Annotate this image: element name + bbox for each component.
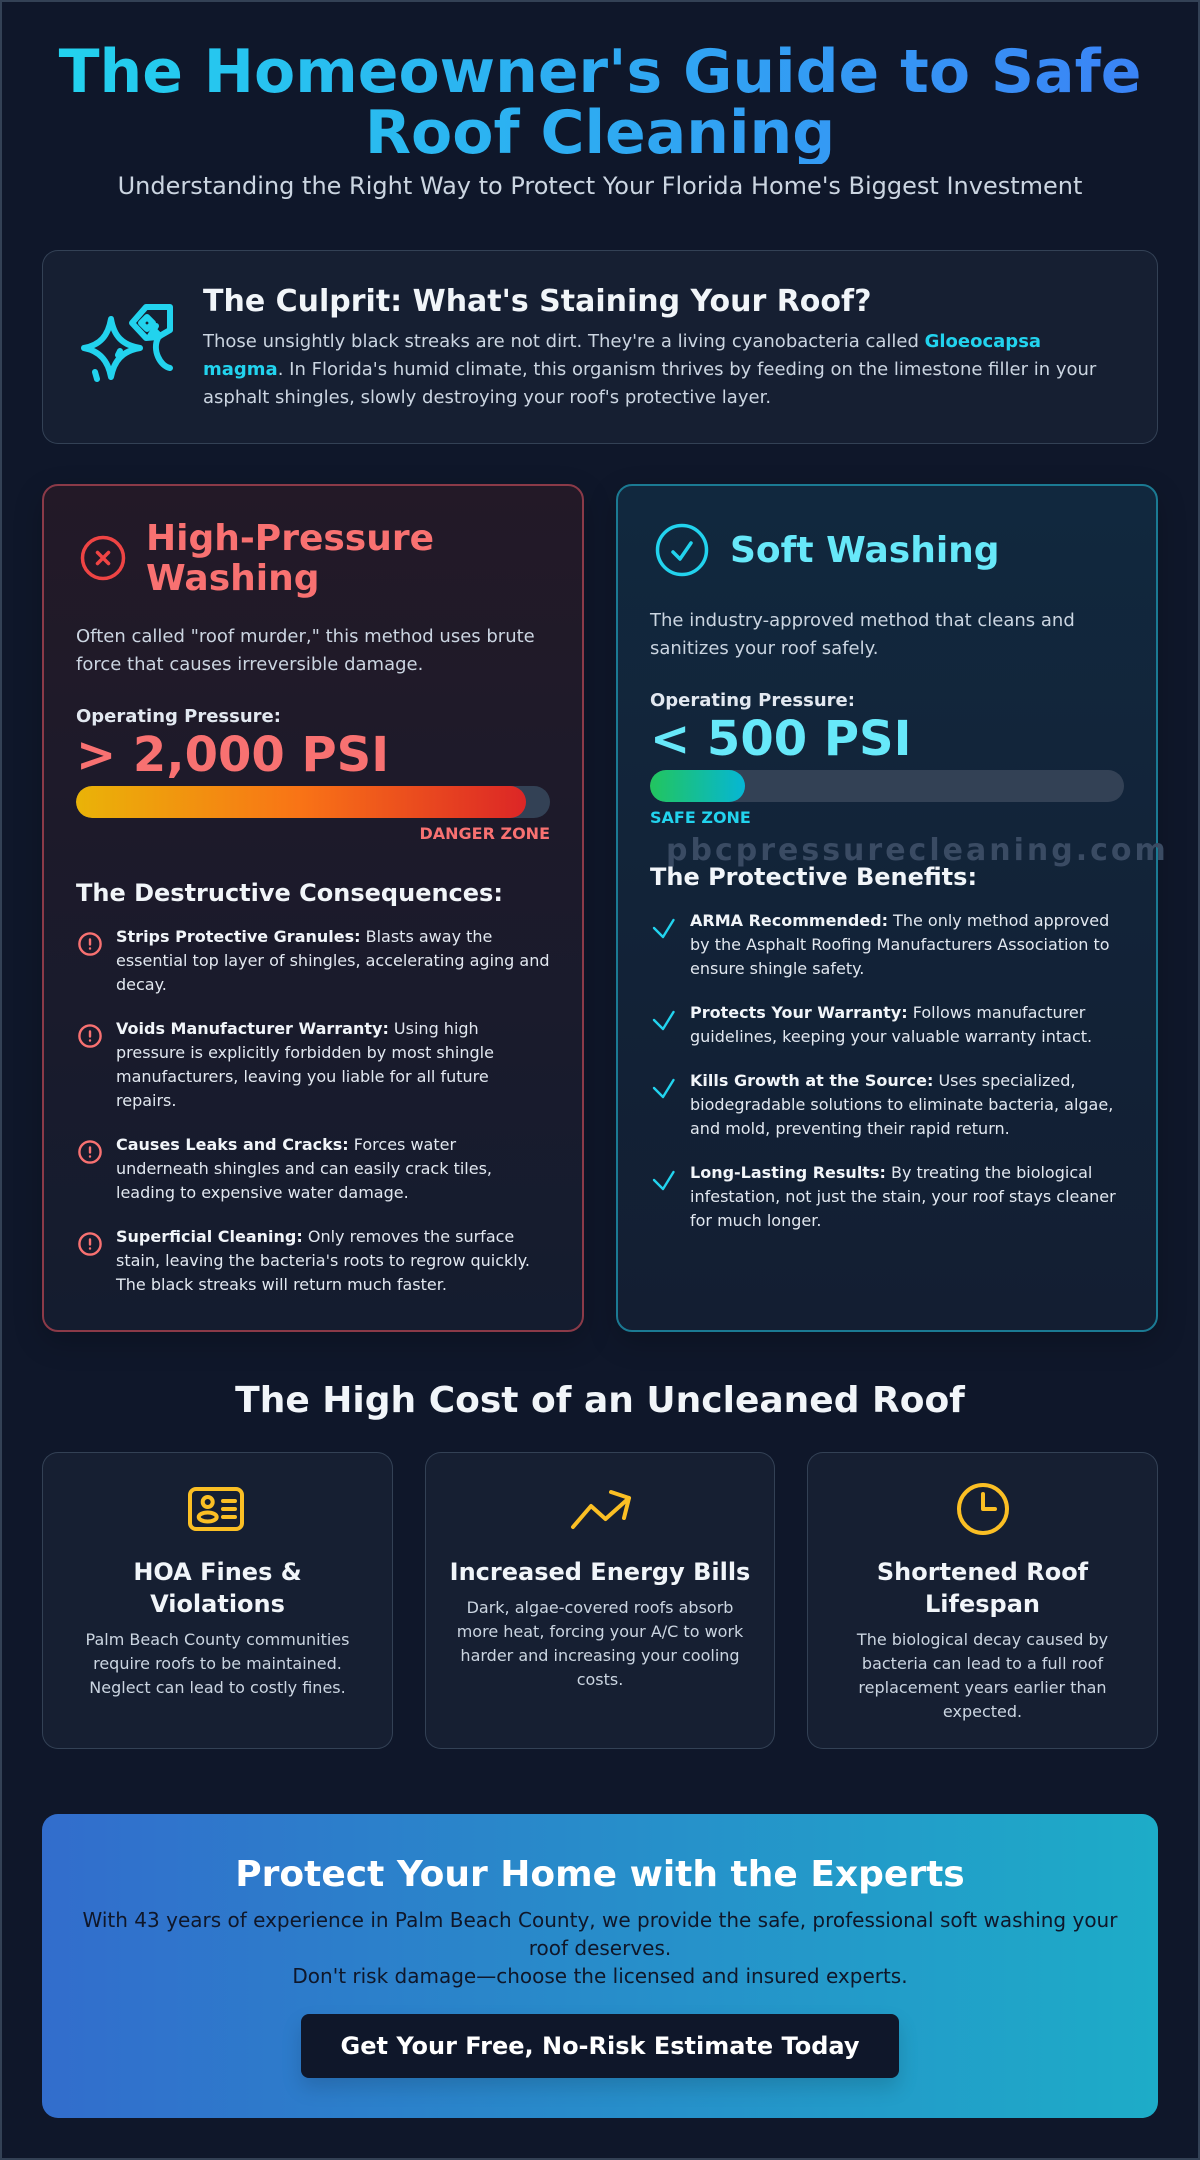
consequence 3: [78, 1135, 492, 1202]
card text: harder and increasing your cooling: [460, 1646, 740, 1665]
consequences heading: The Destructive Consequences:: [76, 879, 503, 907]
text: Long-Lasting Results: By treating the biological: [690, 1163, 1092, 1182]
card text: [856, 1630, 1108, 1721]
pressure bar: [76, 786, 550, 818]
text: and mold, preventing their rapid return.: [690, 1119, 1010, 1138]
text: Voids Manufacturer Warranty: Using high: [116, 1019, 479, 1038]
panel: high-pressure washing: [42, 484, 584, 1332]
icon: alert: [78, 1232, 102, 1256]
text: [116, 1019, 494, 1110]
danger zone label: DANGER ZONE: [419, 824, 550, 843]
icon: sparkles: [81, 304, 173, 382]
culprit heading: The Culprit: What's Staining Your Roof?: [203, 284, 871, 319]
text: [116, 1227, 530, 1294]
consequence 1: [78, 927, 550, 994]
cta heading: Protect Your Home with the Experts: [235, 1854, 965, 1895]
card text: bacteria can lead to a full roof: [862, 1654, 1103, 1673]
card text: require roofs to be maintained.: [93, 1654, 342, 1673]
card text: Neglect can lead to costly fines.: [89, 1678, 346, 1697]
text: [116, 1135, 492, 1202]
pressure label: Operating Pressure:: [650, 690, 855, 711]
icon: check circle: [656, 524, 708, 576]
card text: replacement years earlier than: [858, 1678, 1107, 1697]
pressure value: < 500 PSI: [650, 711, 911, 767]
icon: id card: [188, 1487, 244, 1531]
cta button: [301, 2014, 899, 2078]
icon: check: [652, 1010, 675, 1030]
card text: costs.: [577, 1670, 623, 1689]
icon: check: [652, 1170, 675, 1190]
icon: alert: [78, 1140, 102, 1164]
subtitle: Understanding the Right Way to Protect Your Florida Home's Biggest Investment: [118, 172, 1082, 200]
text: decay.: [116, 975, 167, 994]
title: The Homeowner's Guide to Safe: [59, 37, 1141, 107]
pressure bar: [650, 770, 1124, 802]
culprit text: asphalt shingles, slowly destroying your roof's protective layer.: [203, 387, 771, 408]
text: for much longer.: [690, 1211, 821, 1230]
text: pressure is explicitly forbidden by most shingle: [116, 1043, 494, 1062]
card text: The biological decay caused by: [857, 1630, 1108, 1649]
pressure label: Operating Pressure:: [76, 706, 281, 727]
culprit text: Those unsightly black streaks are not dirt. They're a living cyanobacteria called Gloeocapsa: [203, 331, 1041, 352]
description: force that causes irreversible damage.: [76, 654, 423, 675]
heading: High-Pressure: [146, 518, 434, 559]
pressure value: > 2,000 PSI: [76, 727, 389, 783]
watermark: pbcpressurecleaning.com: [666, 833, 1169, 868]
cost card: energy bills: [425, 1452, 775, 1749]
text: repairs.: [116, 1091, 176, 1110]
icon: check: [652, 918, 675, 938]
card text: [86, 1630, 349, 1697]
benefit 4: [652, 1163, 1116, 1230]
text: guidelines, keeping your valuable warranty intact.: [690, 1027, 1092, 1046]
culprit text: magma. In Florida's humid climate, this organism thrives by feeding on the limestone filler in your: [203, 359, 1096, 380]
panel: soft washing: [616, 484, 1158, 1332]
cta text: Don't risk damage—choose the licensed and insured experts.: [292, 1964, 908, 1988]
description: sanitizes your roof safely.: [650, 638, 878, 659]
section heading: cost: The High Cost of an Uncleaned Roof: [235, 1380, 965, 1421]
cta text: [83, 1908, 1118, 1988]
culprit text: [202, 331, 1096, 408]
cost card: roof lifespan: [807, 1452, 1158, 1749]
card heading: Lifespan: [925, 1590, 1040, 1618]
consequence 4: [78, 1227, 530, 1294]
text: [690, 1003, 1092, 1046]
card heading: [877, 1558, 1088, 1618]
cost card: HOA fines: [42, 1452, 393, 1749]
call to action: [42, 1814, 1158, 2118]
text: Protects Your Warranty: Follows manufacturer: [690, 1003, 1085, 1022]
text: [690, 1163, 1116, 1230]
text: [116, 927, 550, 994]
text: essential top layer of shingles, accelerating aging and: [116, 951, 550, 970]
benefit 2: [652, 1003, 1092, 1046]
icon: trending up: [570, 1490, 632, 1530]
description: [650, 610, 1075, 659]
card heading: Shortened Roof: [877, 1558, 1088, 1586]
text: ensure shingle safety.: [690, 959, 864, 978]
panel: the culprit: [42, 250, 1158, 444]
text: ARMA Recommended: The only method approved: [690, 911, 1109, 930]
text: stain, leaving the bacteria's roots to regrow quickly.: [116, 1251, 530, 1270]
text: [690, 911, 1110, 978]
icon: alert: [78, 932, 102, 956]
benefit 1: [652, 911, 1110, 978]
text: underneath shingles and can easily crack tiles,: [116, 1159, 492, 1178]
card text: [457, 1598, 744, 1689]
heading: Soft Washing: [730, 530, 1000, 571]
consequence 2: [78, 1019, 494, 1110]
button label: Get Your Free, No-Risk Estimate Today: [341, 2032, 859, 2060]
benefits heading: The Protective Benefits:: [650, 863, 977, 891]
icon: check: [652, 1078, 675, 1098]
text: by the Asphalt Roofing Manufacturers Association to: [690, 935, 1110, 954]
card heading: [133, 1558, 302, 1618]
text: Causes Leaks and Cracks: Forces water: [116, 1135, 456, 1154]
safe zone label: SAFE ZONE: [650, 808, 751, 827]
title: [42, 42, 1158, 164]
text: The black streaks will return much faster.: [116, 1275, 447, 1294]
text: leading to expensive water damage.: [116, 1183, 409, 1202]
card heading: Violations: [150, 1590, 285, 1618]
card text: expected.: [943, 1702, 1022, 1721]
text: Superficial Cleaning: Only removes the surface: [116, 1227, 514, 1246]
description: Often called "roof murder," this method uses brute: [76, 626, 535, 647]
card heading: HOA Fines &: [133, 1558, 302, 1586]
card heading: Increased Energy Bills: [450, 1558, 750, 1586]
text: Strips Protective Granules: Blasts away the: [116, 927, 492, 946]
text: [690, 1071, 1113, 1138]
icon: clock: [957, 1483, 1009, 1535]
title: Roof Cleaning: [365, 98, 835, 168]
card text: Dark, algae-covered roofs absorb: [467, 1598, 733, 1617]
benefit 3: [652, 1071, 1113, 1138]
description: The industry-approved method that cleans and: [650, 610, 1075, 631]
cta text: With 43 years of experience in Palm Beach County, we provide the safe, professional soft washing your: [83, 1908, 1117, 1932]
text: manufacturers, leaving you liable for all future: [116, 1067, 489, 1086]
description: [76, 626, 535, 675]
heading: [146, 518, 434, 599]
cta text: roof deserves.: [529, 1936, 671, 1960]
text: infestation, not just the stain, your roof stays cleaner: [690, 1187, 1116, 1206]
icon: x circle: [80, 536, 126, 580]
card text: more heat, forcing your A/C to work: [457, 1622, 743, 1641]
heading: Washing: [146, 558, 320, 599]
text: Kills Growth at the Source: Uses specialized,: [690, 1071, 1076, 1090]
text: biodegradable solutions to eliminate bacteria, algae,: [690, 1095, 1113, 1114]
card text: Palm Beach County communities: [86, 1630, 349, 1649]
icon: alert: [78, 1024, 102, 1048]
